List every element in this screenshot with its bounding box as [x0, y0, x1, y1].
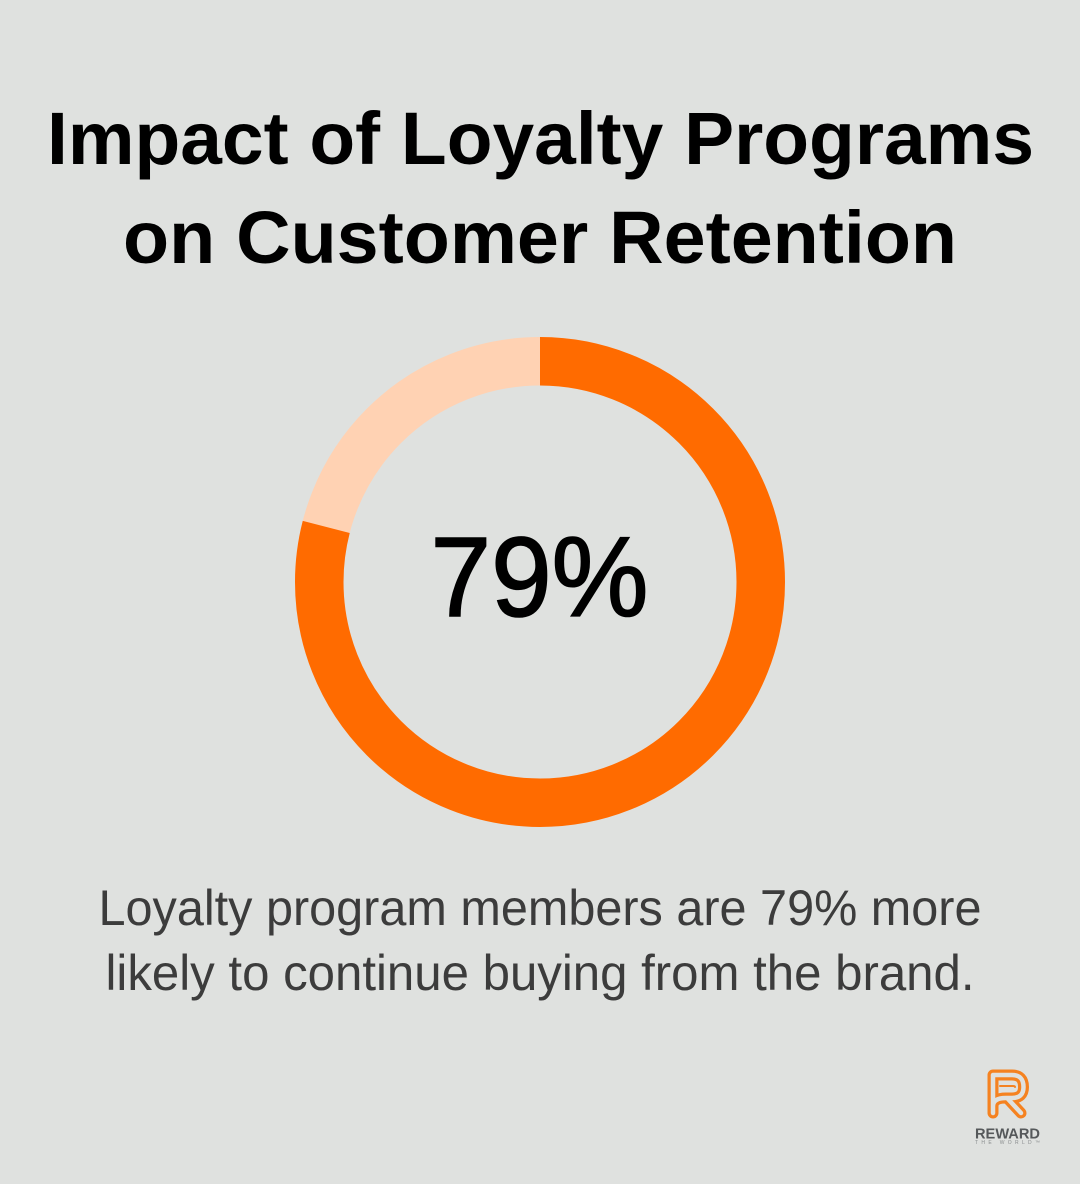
description: likely to continue buying from the brand.: [106, 945, 974, 1001]
donut chart: 79%: [319, 361, 761, 803]
center value: 79%: [430, 514, 648, 640]
title: [47, 97, 1034, 279]
icon: R mark: [993, 1075, 1024, 1113]
logo: Reward the World: [975, 1075, 1040, 1146]
description: Loyalty program members are 79% more: [98, 880, 982, 936]
description: [98, 880, 982, 1001]
wordmark: REWARD: [975, 1126, 1040, 1142]
title: on Customer Retention: [123, 196, 957, 279]
title: Impact of Loyalty Programs: [47, 97, 1034, 180]
tagline: THE WORLD™: [975, 1140, 1040, 1146]
